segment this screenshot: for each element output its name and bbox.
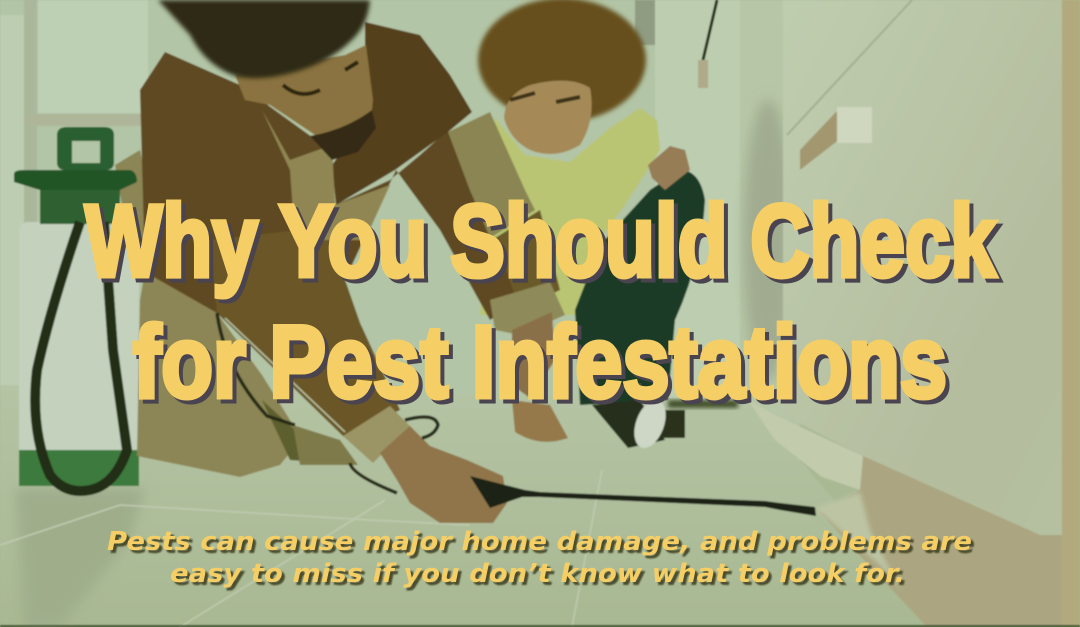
wall — [0, 0, 800, 430]
collar and chest panel — [262, 110, 390, 240]
torso — [140, 52, 520, 436]
subtitle — [107, 527, 975, 592]
near cuff — [343, 406, 410, 463]
cabinet — [783, 0, 1062, 535]
subtitle shadow: Pests can cause major home damage, and problems are — [110, 530, 975, 560]
spray bottle — [14, 127, 139, 491]
subtitle shadow: easy to miss if you don’t know what to look for. — [173, 562, 908, 592]
bottom edge — [0, 625, 1080, 627]
hand holding wand — [380, 426, 507, 523]
woman — [478, 0, 705, 452]
flashlight — [592, 396, 685, 452]
subtitle line 1: Pests can cause major home damage, and problems are — [107, 527, 972, 557]
skirting and side panel — [820, 456, 1062, 627]
far cuff and wrist — [490, 282, 565, 335]
technician — [137, 0, 565, 523]
neck and face — [235, 45, 373, 148]
technician's heel behind the bottle — [115, 150, 160, 250]
subtitle line 2: easy to miss if you don’t know what to look for. — [170, 559, 905, 589]
trousers — [137, 270, 300, 477]
floor — [0, 385, 940, 627]
hair — [158, 0, 370, 78]
title — [85, 184, 1000, 423]
spray wand — [470, 476, 816, 516]
piping — [225, 318, 345, 432]
subtitle shadow — [110, 530, 975, 592]
hose — [217, 313, 438, 493]
cabinet handle — [800, 107, 872, 170]
sleeve patch — [448, 112, 535, 238]
